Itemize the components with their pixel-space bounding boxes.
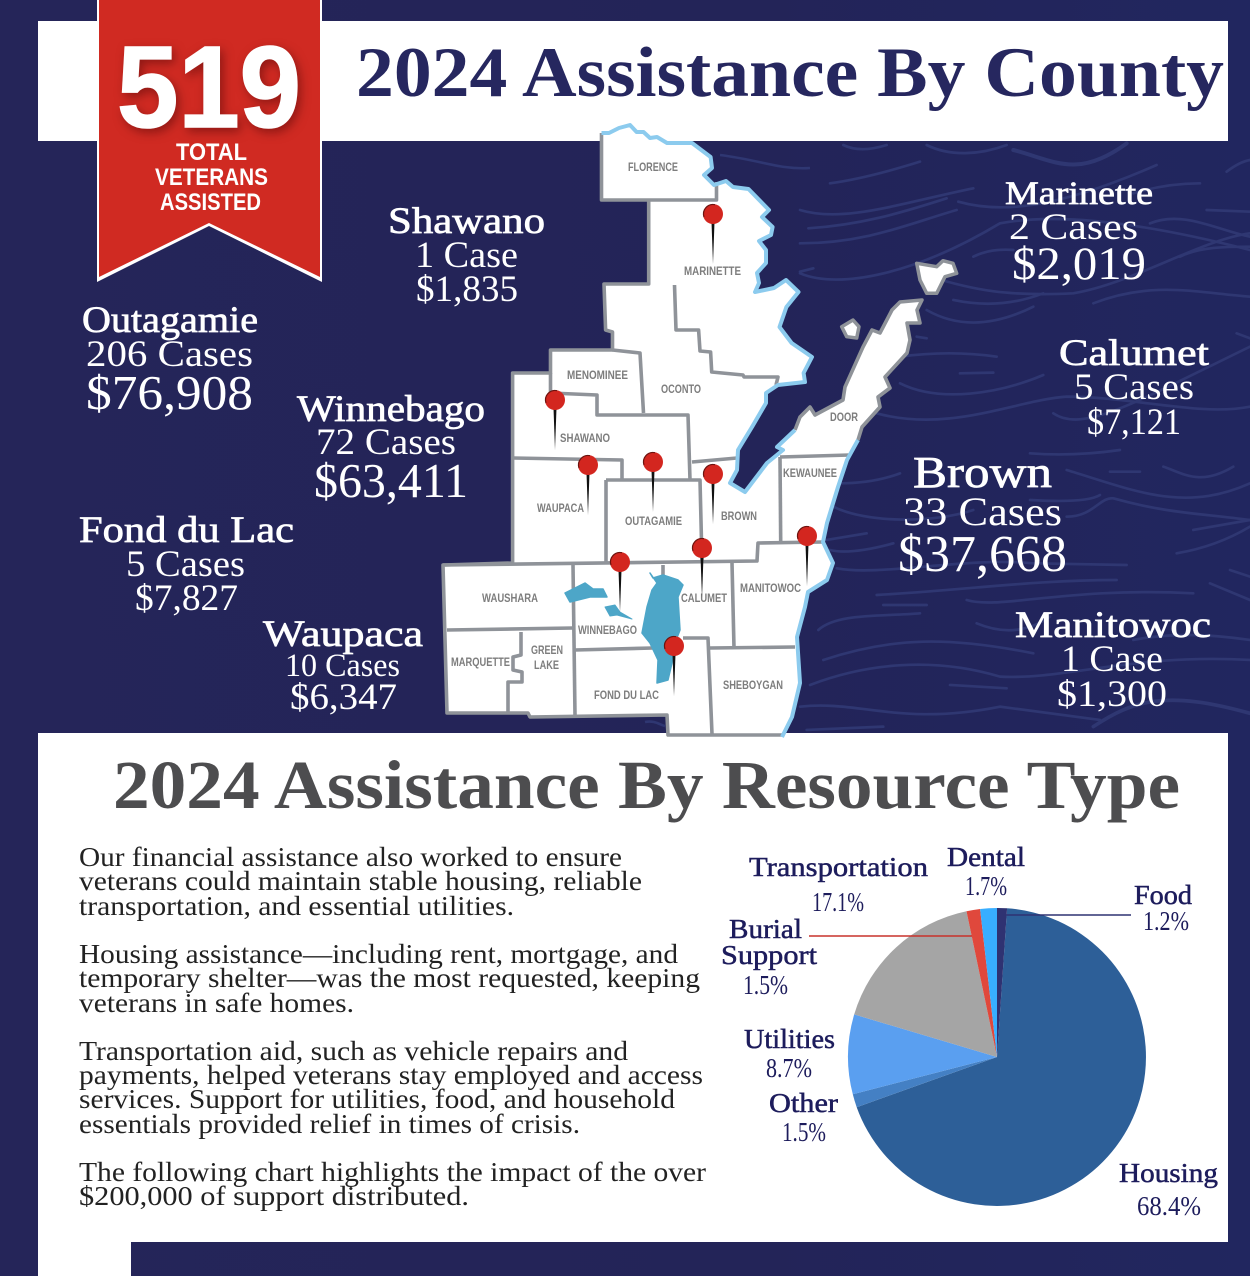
county labels: SHEBOYGAN (723, 678, 783, 692)
title: 2024 Assistance By County: 2024 Assistance By County (356, 34, 1224, 112)
county labels: SHAWANO (560, 431, 610, 445)
stat: Winnebago: $63,411 (314, 453, 468, 508)
body text: veterans in safe homes. (79, 988, 354, 1018)
stat: Winnebago: Winnebago (297, 389, 485, 430)
coastline (602, 125, 812, 492)
stat: Marinette: $2,019 (1012, 238, 1146, 290)
stat: Shawano: Shawano (388, 201, 545, 242)
body text: Transportation aid, such as vehicle repairs and (79, 1036, 629, 1066)
stat: Calumet (1059, 333, 1210, 443)
map of counties (443, 125, 957, 737)
county labels: WAUSHARA (482, 591, 538, 605)
label: Transportation: 17.1% (812, 887, 864, 917)
stat: Outagamie: $76,908 (86, 365, 253, 420)
county labels: WINNEBAGO (578, 623, 637, 637)
lake winnebago (642, 573, 683, 683)
lake butte des morts (565, 583, 607, 602)
small island (842, 320, 859, 338)
slice: food (997, 908, 1007, 1057)
label: Housing: 68.4% (1137, 1191, 1201, 1221)
stat: Shawano: $1,835 (416, 269, 518, 310)
county labels: FLORENCE (628, 160, 678, 174)
stat: Calumet: 5 Cases (1074, 367, 1194, 408)
stat: Outagamie (82, 300, 258, 420)
label: Dental (947, 842, 1025, 901)
stat: Shawano: 1 Case (415, 235, 518, 276)
lake poygan (605, 605, 632, 619)
stat: Brown: 33 Cases (903, 489, 1062, 534)
label: Utilities (744, 1024, 835, 1083)
label: Burial Support: 1.5% (743, 970, 788, 1000)
label: Utilities: 8.7% (766, 1053, 812, 1083)
label: Transportation: Transportation (749, 852, 929, 882)
leader line: food (1003, 914, 1131, 916)
stat: Fond du Lac: 5 Cases (126, 544, 245, 585)
stat: Marinette: 2 Cases (1009, 207, 1138, 248)
body text (79, 842, 706, 1211)
slice: housing (857, 908, 1146, 1206)
label: Burial Support: Support (721, 940, 818, 970)
label: Food: 1.2% (1143, 906, 1189, 936)
stat: Calumet: Calumet (1059, 333, 1210, 374)
body text: $200,000 of support distributed. (79, 1181, 469, 1211)
ribbon caption (155, 139, 268, 216)
stat: Waupaca (263, 614, 423, 718)
body text: temporary shelter—was the most requested, keeping (79, 963, 700, 993)
heading: 2024 Assistance By Resource Type: 2024 Assistance By Resource Type (113, 747, 1180, 823)
county labels: MARINETTE (684, 264, 741, 278)
stat: Marinette: Marinette (1005, 176, 1153, 212)
ribbon caption: TOTAL (176, 139, 247, 166)
water pattern south (800, 450, 1250, 730)
stat: Waupaca: $6,347 (290, 677, 397, 718)
stat: Marinette (1005, 176, 1153, 290)
stat: Winnebago: 72 Cases (316, 422, 456, 463)
label: Housing: Housing (1119, 1158, 1218, 1188)
label: Dental: 1.7% (965, 871, 1007, 901)
big number: 519 (117, 22, 301, 152)
map pins (545, 204, 817, 696)
ribbon: 519 total veterans assisted (97, 0, 322, 282)
stat: Shawano (388, 201, 545, 310)
label: Utilities: Utilities (744, 1024, 835, 1054)
label: Transportation (749, 852, 929, 917)
panel: resource type (38, 733, 1228, 1276)
leader line: burial support (809, 935, 972, 937)
stat: Manitowoc: $1,300 (1057, 674, 1167, 715)
stat: Waupaca: 10 Cases (285, 648, 400, 684)
county labels: DOOR (830, 410, 858, 424)
label: Burial Support (721, 914, 818, 1000)
county labels: CALUMET (681, 591, 728, 605)
stat: Manitowoc (1015, 605, 1211, 715)
water pattern near fond du lac (645, 722, 665, 726)
slice: dental (980, 908, 997, 1057)
label: Food (1134, 880, 1193, 936)
label: Dental: Dental (947, 842, 1025, 872)
body text: services. Support for utilities, food, and household (79, 1084, 676, 1114)
label: Other: 1.5% (782, 1117, 826, 1147)
label: Burial Support: Burial (729, 914, 802, 944)
county labels: LAKE (534, 658, 559, 672)
slice: transportation (854, 911, 997, 1057)
label: Other: Other (769, 1088, 838, 1118)
county labels: MARQUETTE (451, 655, 510, 669)
water pattern upper band (720, 155, 810, 168)
island (917, 261, 957, 293)
label: Housing (1119, 1158, 1218, 1221)
stat: Fond du Lac: Fond du Lac (79, 510, 294, 551)
land area (443, 125, 922, 737)
stat: Brown: $37,668 (898, 526, 1067, 583)
stat: Brown: Brown (913, 448, 1052, 497)
pie chart (848, 908, 1146, 1206)
body text: payments, helped veterans stay employed and access (79, 1060, 703, 1090)
stat: Manitowoc: Manitowoc (1015, 605, 1211, 646)
county labels: GREEN (531, 643, 563, 657)
county labels: MENOMINEE (567, 368, 628, 382)
county labels: OUTAGAMIE (625, 514, 682, 528)
body text: Housing assistance—including rent, mortgage, and (79, 939, 679, 969)
county labels: WAUPACA (537, 501, 584, 515)
slice: utilities (848, 1014, 997, 1094)
stat: Brown (898, 448, 1067, 583)
county labels: MANITOWOC (740, 581, 801, 595)
body text: essentials provided relief in times of crisis. (79, 1109, 580, 1139)
county labels: FOND DU LAC (594, 688, 659, 702)
stat: Fond du Lac: $7,827 (135, 578, 238, 619)
label: Other (769, 1088, 838, 1147)
slice: burial support (966, 909, 997, 1057)
ribbon caption: ASSISTED (160, 189, 261, 216)
body text: Our financial assistance also worked to ensure (79, 842, 622, 872)
water pattern north (800, 143, 1250, 420)
ribbon caption: VETERANS (155, 164, 268, 191)
title banner (38, 21, 1228, 141)
county labels (451, 160, 858, 702)
stat: Waupaca: Waupaca (263, 614, 423, 655)
body text: transportation, and essential utilities. (79, 891, 514, 921)
slice: other (853, 1057, 997, 1107)
county lines (443, 133, 922, 735)
stat: Winnebago (297, 389, 485, 508)
stat: Manitowoc: 1 Case (1061, 639, 1163, 680)
body text: The following chart highlights the impact of the over (79, 1157, 706, 1187)
county labels: OCONTO (661, 382, 701, 396)
east coastline (782, 440, 858, 737)
label: Food: Food (1134, 880, 1193, 910)
county labels: BROWN (721, 509, 757, 523)
stat: Calumet: $7,121 (1087, 402, 1181, 443)
stat: Outagamie: 206 Cases (86, 334, 253, 375)
stat: Outagamie: Outagamie (82, 300, 258, 341)
county labels: KEWAUNEE (783, 466, 837, 480)
stat: Fond du Lac (79, 510, 294, 619)
body text: veterans could maintain stable housing, reliable (79, 866, 642, 896)
